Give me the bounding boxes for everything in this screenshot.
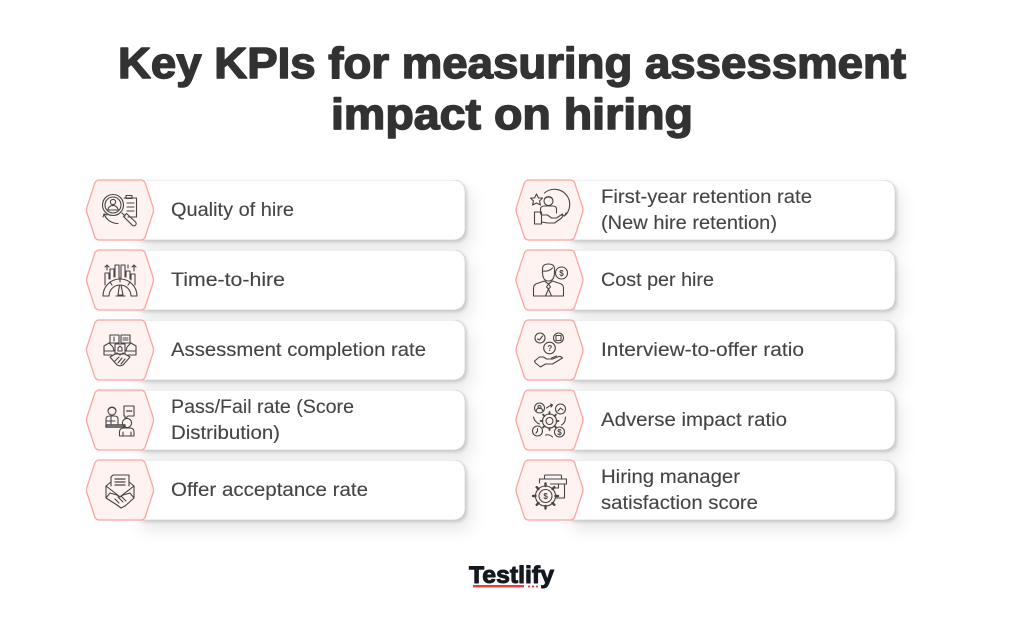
KPI row: Time-to-hire <box>86 250 464 310</box>
KPI row: Cost per hire <box>516 250 894 310</box>
KPI row: Adverse impact ratio <box>516 390 894 450</box>
logo: Testlify: Testlify <box>469 562 554 589</box>
KPI row: Pass/Fail rate (Score Distribution) <box>86 390 464 450</box>
icon: hand holding question bubbles <box>534 333 564 367</box>
icon: envelope with handshake <box>106 475 134 508</box>
icon: central gear with circled metrics: $ <box>557 428 562 437</box>
label <box>601 187 812 234</box>
label: Time-to-hire <box>171 270 285 291</box>
icon: gear with dollar and briefcase <box>533 475 566 508</box>
title: impact on hiring <box>331 91 693 139</box>
KPI row: Quality of hire <box>86 180 464 240</box>
KPI row: Interview-to-offer ratio <box>516 320 894 380</box>
label: Adverse impact ratio <box>601 410 787 431</box>
label: Cost per hire <box>601 270 714 291</box>
label: First-year retention rate <box>601 187 812 208</box>
icon: gear with dollar and briefcase: $ <box>543 492 548 501</box>
icon: speedometer with rising bars <box>103 265 137 296</box>
KPI row: Hiring manager satisfaction score <box>516 460 894 520</box>
KPI row: Assessment completion rate <box>86 320 464 380</box>
title: Key KPIs for measuring assessment <box>118 40 906 88</box>
icon: hand holding question bubbles: ? <box>547 344 552 353</box>
icon: employee with star, hand and arrow <box>530 189 570 224</box>
label: satisfaction score <box>601 493 758 514</box>
icon: central gear with circled metrics <box>532 403 566 437</box>
label <box>601 467 758 514</box>
KPI row: Offer acceptance rate <box>86 460 464 520</box>
label <box>171 397 354 444</box>
title <box>118 40 906 139</box>
label: Quality of hire <box>171 200 294 221</box>
label: Interview-to-offer ratio <box>601 340 804 361</box>
label: Distribution) <box>171 423 280 444</box>
label: Hiring manager <box>601 467 741 488</box>
label: Pass/Fail rate (Score <box>171 397 354 418</box>
label: Assessment completion rate <box>171 340 426 361</box>
icon: magnifier over candidate and clipboard <box>102 194 136 226</box>
KPI row: First-year retention rate <box>516 180 894 240</box>
label: (New hire retention) <box>601 213 777 234</box>
icon: person with tie and dollar coin: $ <box>559 269 564 278</box>
label: Offer acceptance rate <box>171 480 368 501</box>
icon: interview at desk with speech bubble <box>106 406 134 436</box>
icon: documents and handshake <box>104 335 136 366</box>
icon: person with tie and dollar coin <box>534 264 568 296</box>
